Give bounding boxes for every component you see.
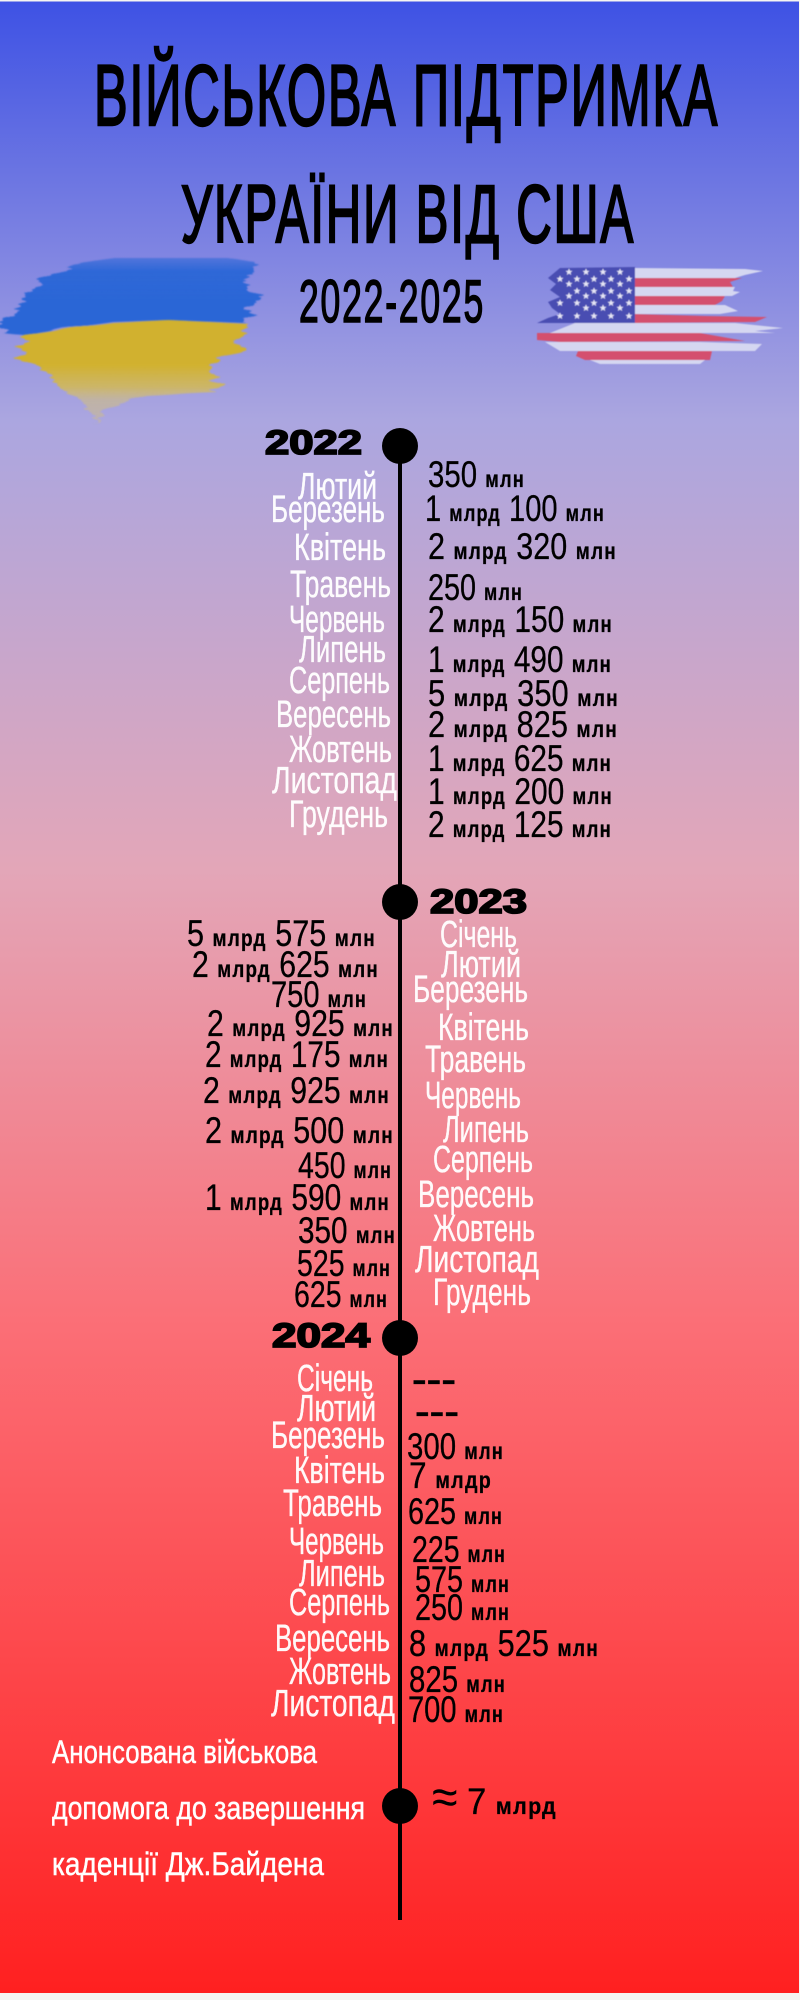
note: announced aid: допомога до завершення	[52, 1790, 365, 1826]
timeline node: 2023	[382, 884, 418, 920]
months 2023: Грудень	[433, 1272, 531, 1314]
title	[94, 47, 719, 260]
amounts 2022: 250 млн	[428, 567, 523, 608]
amounts 2022: 1 млрд 625 млн	[428, 738, 612, 779]
months 2024	[271, 1358, 395, 1725]
months 2022: Лютий	[298, 466, 377, 508]
amounts 2024: ---	[415, 1396, 459, 1429]
timeline node: 2022	[382, 428, 418, 464]
months 2023: Травень	[425, 1039, 526, 1081]
months 2023: Червень	[425, 1075, 521, 1117]
timeline axis	[382, 428, 418, 1920]
note: announced aid: каденції Дж.Байдена	[52, 1846, 324, 1882]
red stripes	[537, 278, 767, 360]
months 2022: Червень	[289, 599, 385, 641]
months 2024: Липень	[299, 1553, 385, 1595]
amounts 2022: 5 млрд 350 млн	[428, 673, 619, 714]
amounts 2022: 2 млрд 825 млн	[428, 704, 618, 745]
amounts 2022: 350 млн	[428, 454, 525, 495]
amounts 2024: 225 млн	[412, 1529, 506, 1570]
months 2024: Листопад	[271, 1683, 395, 1725]
amounts 2024: 575 млн	[415, 1559, 510, 1600]
year label 2023: 2023	[430, 883, 527, 921]
amounts 2023: 450 млн	[298, 1145, 392, 1186]
amounts 2024	[407, 1364, 599, 1730]
amounts 2022: 2 млрд 320 млн	[428, 526, 617, 567]
months 2023: Вересень	[418, 1174, 534, 1216]
months 2022: Березень	[271, 489, 385, 531]
amounts 2024: 250 млн	[415, 1587, 510, 1628]
amounts 2024: 825 млн	[409, 1659, 506, 1700]
months 2022: Вересень	[276, 694, 391, 736]
amounts 2023: 525 млн	[297, 1243, 391, 1284]
amounts 2022: 2 млрд 125 млн	[428, 804, 612, 845]
amounts 2023: 2 млрд 925 млн	[203, 1070, 390, 1111]
year label 2022: 2022	[265, 424, 362, 462]
amounts 2022: 1 млрд 490 млн	[428, 639, 612, 680]
amounts 2024: 7 млдр	[409, 1455, 492, 1496]
months 2023: Квітень	[438, 1007, 529, 1049]
amounts 2023: 1 млрд 590 млн	[205, 1177, 390, 1218]
months 2023: Березень	[413, 969, 528, 1011]
months 2022: Грудень	[289, 794, 388, 836]
amounts 2023: 2 млрд 500 млн	[205, 1110, 394, 1151]
amounts 2024: 300 млн	[407, 1426, 504, 1467]
amounts 2024: ---	[412, 1364, 456, 1397]
amounts 2023: 625 млн	[294, 1274, 388, 1315]
amounts 2023: 2 млрд 175 млн	[205, 1034, 389, 1075]
months 2023: Липень	[443, 1109, 529, 1151]
amounts 2024: 700 млн	[408, 1689, 504, 1730]
amounts 2022: 2 млрд 150 млн	[428, 599, 613, 640]
amounts 2022	[425, 454, 619, 845]
timeline node: 2024	[382, 1320, 418, 1356]
months 2024: Травень	[283, 1483, 382, 1525]
amounts 2022: 1 млрд 100 млн	[425, 488, 605, 529]
icon: USA flag brush stroke	[537, 267, 783, 364]
timeline node: announced aid	[382, 1788, 418, 1824]
months 2024: Червень	[289, 1521, 384, 1563]
amounts 2023: 2 млрд 625 млн	[192, 944, 379, 985]
amounts 2023: 350 млн	[298, 1210, 396, 1251]
months 2024: Жовтень	[289, 1651, 391, 1693]
months 2024: Березень	[271, 1415, 385, 1457]
months 2023: Серпень	[433, 1139, 533, 1181]
amounts 2022: 1 млрд 200 млн	[428, 771, 613, 812]
canton	[537, 267, 635, 323]
months 2024: Квітень	[294, 1450, 385, 1492]
amounts 2023: 2 млрд 925 млн	[207, 1003, 394, 1044]
months 2024: Вересень	[275, 1618, 390, 1660]
amounts 2024: 625 млн	[408, 1491, 503, 1532]
amounts 2023: 5 млрд 575 млн	[187, 913, 376, 954]
months 2023: Січень	[440, 914, 517, 956]
icon: Ukrainian flag brush stroke	[0, 258, 258, 424]
months 2023	[413, 914, 539, 1314]
amounts 2024: 8 млрд 525 млн	[409, 1623, 599, 1664]
months 2023: Листопад	[415, 1239, 539, 1281]
months 2022: Квітень	[294, 527, 386, 569]
months 2024: Серпень	[289, 1582, 390, 1624]
months 2022: Жовтень	[289, 729, 392, 771]
months 2022: Листопад	[272, 760, 397, 802]
months 2022: Липень	[299, 629, 386, 671]
months 2022: Серпень	[289, 660, 390, 702]
amount: announced aid: ≈ 7 млрд	[432, 1769, 557, 1825]
section: 2024	[271, 1317, 599, 1730]
note: announced aid	[52, 1734, 365, 1882]
months 2022: Травень	[290, 564, 391, 606]
year label 2024: 2024	[272, 1317, 370, 1355]
amounts 2023: 750 млн	[271, 974, 367, 1015]
note: announced aid: Анонсована військова	[52, 1734, 317, 1770]
months 2023: Жовтень	[433, 1208, 535, 1250]
amounts 2023	[187, 913, 396, 1315]
subtitle: years: 2022-2025	[299, 268, 485, 335]
light stripes	[545, 268, 783, 364]
months 2024: Січень	[297, 1358, 373, 1400]
months 2024: Лютий	[297, 1388, 376, 1430]
section: 2022	[265, 424, 619, 845]
months 2023: Лютий	[441, 944, 521, 986]
section: 2023	[187, 883, 539, 1315]
months 2022	[271, 466, 397, 836]
stars	[556, 268, 632, 319]
